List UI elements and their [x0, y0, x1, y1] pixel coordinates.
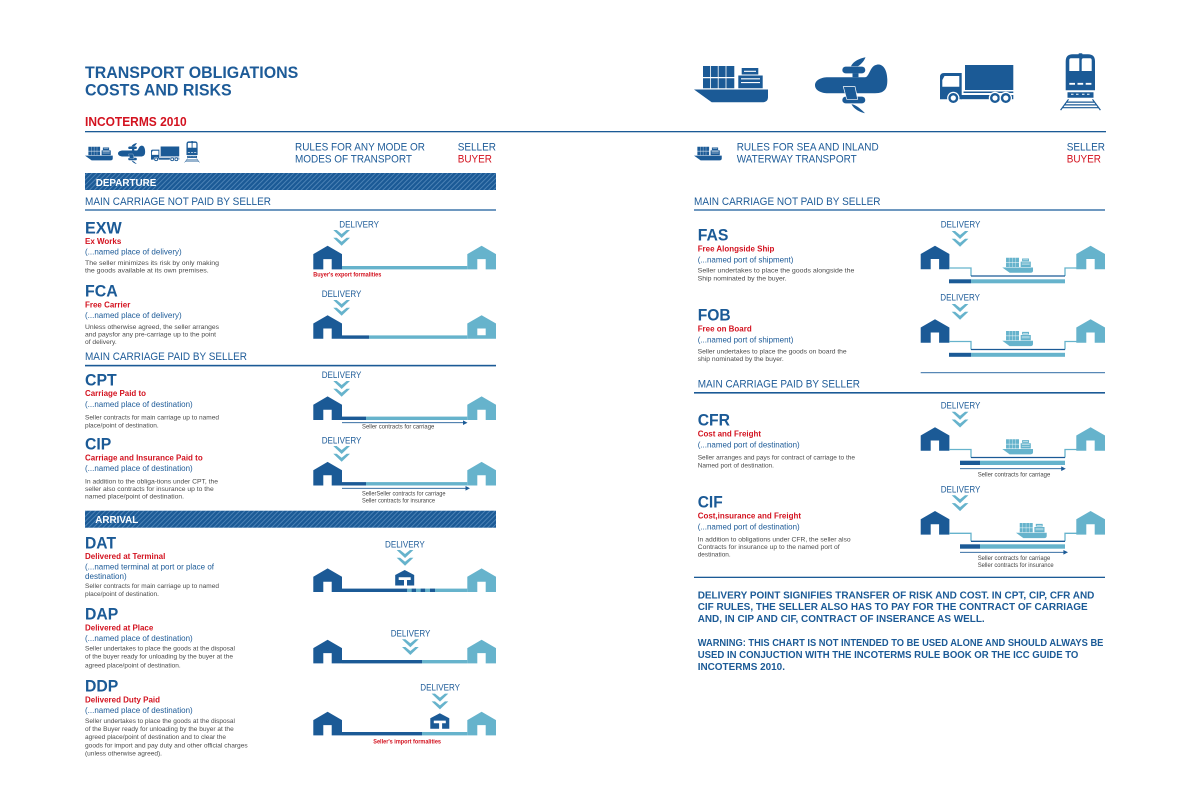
term: FOB: FOB — [698, 307, 731, 325]
term: DDP: (...named place of destination) — [85, 705, 193, 715]
diagram: EXW: Buyer's export formalities — [313, 272, 382, 278]
term: DAT: (...named terminal at port or place of — [85, 562, 215, 572]
term: EXW: (...named place of delivery) — [85, 246, 182, 256]
diagram: CIP: SellerSeller contracts for carriage — [362, 492, 446, 498]
heading: main carriage paid by seller (left): MAIN CARRIAGE PAID BY SELLER — [85, 351, 247, 363]
term: DAT: destination) — [85, 571, 127, 581]
diagram: CIP — [313, 436, 496, 505]
term: DAT: DAT — [85, 534, 116, 552]
term: CIP: In addition to the obliga-tions under CPT, the — [85, 478, 218, 485]
diagram: CIP: Seller contracts for insurance — [362, 499, 436, 505]
legend: seller and buyer: SELLER — [1067, 142, 1105, 154]
term: CIF — [698, 494, 851, 559]
term: CIP: Carriage and Insurance Paid to — [85, 453, 203, 462]
legend: seller and buyer: SELLER — [458, 142, 496, 154]
term: FAS: Ship nominated by the buyer. — [698, 275, 787, 282]
heading: rules for any mode: MODES OF TRANSPORT — [295, 154, 412, 166]
diagram: CFR: Seller contracts for carriage — [978, 472, 1051, 478]
term: DDP: DDP — [85, 678, 118, 696]
term: CPT: CPT — [85, 371, 117, 389]
term: DAP: Delivered at Place — [85, 623, 154, 632]
heading: rules for sea and inland waterway: WATERWAY TRANSPORT — [737, 153, 857, 165]
term: CFR: CFR — [698, 412, 730, 430]
diagram: DDP — [313, 683, 496, 746]
term: CIF: In addition to obligations under CFR, the seller also — [698, 537, 851, 544]
term: CPT — [85, 371, 219, 429]
diagram: DAT — [313, 539, 496, 592]
term: DAP: Seller undertakes to place the goods at the disposal — [85, 646, 236, 653]
band: arrival: ARRIVAL — [95, 514, 139, 526]
legend: seller and buyer — [1067, 142, 1105, 165]
heading: rules for sea and inland waterway: RULES FOR SEA AND INLAND — [737, 142, 879, 154]
diagram: FCA: DELIVERY — [322, 289, 361, 299]
term: EXW: Ex Works — [85, 237, 122, 246]
term: DDP: of the Buyer ready for unloading by the buyer at the — [85, 726, 234, 733]
heading: main carriage paid by seller (right): MAIN CARRIAGE PAID BY SELLER — [698, 378, 860, 390]
term: FOB — [698, 307, 847, 363]
heading: rules for any mode: RULES FOR ANY MODE OR — [295, 142, 425, 154]
term: FAS: (...named port of shipment) — [698, 254, 794, 264]
icon: plane — [815, 57, 887, 113]
term: FAS: FAS — [698, 227, 728, 245]
icons: large transport modes — [694, 53, 1100, 113]
diagram: FOB: DELIVERY — [940, 293, 980, 303]
diagram: DAT: DELIVERY — [385, 539, 425, 549]
note: delivery point: AND, IN CIP AND CIF, CONTRACT OF INSERANCE AS WELL. — [698, 614, 985, 625]
term: FCA — [85, 283, 220, 346]
term: EXW: the goods available at its own premises. — [85, 268, 209, 275]
term: CIP: named place/point of destination. — [85, 494, 184, 501]
term: EXW: EXW — [85, 219, 122, 237]
term: DDP: (unless otherwise agreed). — [85, 750, 162, 757]
diagram: CPT: DELIVERY — [322, 370, 361, 380]
diagram: CIP: DELIVERY — [322, 436, 361, 446]
diagram: CFR — [921, 401, 1105, 478]
term: FAS — [698, 227, 855, 282]
heading: main carriage not paid by seller (left): MAIN CARRIAGE NOT PAID BY SELLER — [85, 196, 271, 208]
term: FCA: Unless otherwise agreed, the seller arranges — [85, 324, 220, 331]
term: DAP: (...named place of destination) — [85, 633, 193, 643]
term: CPT: (...named place of destination) — [85, 399, 193, 409]
term: CIP: (...named place of destination) — [85, 463, 193, 473]
diagram: CIF: DELIVERY — [941, 484, 980, 494]
term: DDP: goods for import and pay duty and other official charges — [85, 742, 248, 749]
legend: seller and buyer: BUYER — [458, 154, 492, 166]
term: FOB: Seller undertakes to place the goods on board the — [698, 348, 847, 355]
icon: truck — [940, 65, 1013, 104]
term: CFR: Seller arranges and pays for contract of carriage to the — [698, 455, 855, 462]
band: departure: DEPARTURE — [96, 177, 156, 189]
term: FAS: Seller undertakes to place the goods alongside the — [698, 268, 855, 275]
term: DAP: agreed place/point of destination. — [85, 662, 181, 669]
heading: main carriage not paid by seller (right): MAIN CARRIAGE NOT PAID BY SELLER — [694, 196, 881, 208]
subtitle: Incoterms 2010: INCOTERMS 2010 — [85, 115, 187, 129]
icons: small transport modes — [85, 141, 200, 164]
note: delivery point — [698, 590, 1094, 625]
icon: train — [1061, 53, 1100, 110]
legend: seller and buyer: BUYER — [1067, 153, 1101, 165]
term: DDP — [85, 678, 248, 757]
diagram: DDP: DELIVERY — [420, 683, 460, 693]
legend: seller and buyer — [458, 142, 496, 166]
term: DDP: Seller undertakes to place the goods at the disposal — [85, 718, 236, 725]
term: DAP: of the buyer ready for unloading by the buyer at the — [85, 654, 233, 661]
term: EXW: The seller minimizes its risk by only making — [85, 260, 219, 267]
panel header: sea and inland waterway — [694, 142, 1105, 165]
diagram: DDP: Seller's import formalities — [373, 740, 442, 746]
term: CFR: Named port of destination. — [698, 463, 774, 470]
title: COSTS AND RISKS — [85, 82, 232, 100]
diagram: FCA — [313, 289, 496, 339]
term: CFR — [698, 412, 855, 470]
diagram: CIF: Seller contracts for insurance — [978, 563, 1054, 569]
note: warning — [698, 638, 1104, 673]
diagram: EXW — [313, 219, 496, 278]
band: arrival — [85, 511, 496, 528]
diagram: CIF — [921, 484, 1105, 569]
note: delivery point: DELIVERY POINT SIGNIFIES TRANSFER OF RISK AND COST. IN CPT, CIP, CFR AND — [698, 590, 1094, 601]
term: EXW — [85, 219, 219, 275]
diagram: CPT: Seller contracts for carriage — [362, 425, 435, 431]
diagram: CFR: DELIVERY — [941, 401, 980, 411]
band: departure — [85, 173, 496, 190]
heading: rules for any mode — [295, 142, 425, 166]
term: CIF: (...named port of destination) — [698, 521, 800, 531]
term: CIF: Cost,insurance and Freight — [698, 512, 801, 521]
term: DAP: DAP — [85, 606, 118, 624]
title: TRANSPORT OBLIGATIONS — [85, 64, 298, 82]
diagram: FAS — [921, 220, 1105, 283]
term: CPT: Seller contracts for main carriage up to named — [85, 414, 219, 421]
term: FCA: and paysfor any pre-carriage up to the point — [85, 332, 216, 339]
note: warning: USED IN CONJUCTION WITH THE INCOTERMS RULE BOOK OR THE ICC GUIDE TO — [698, 650, 1079, 661]
term: FOB: ship nominated by the buyer. — [698, 356, 784, 363]
diagram: CIF: Seller contracts for carriage — [978, 556, 1051, 562]
term: CIF: Contracts for insurance up to the named port of — [698, 544, 840, 551]
term: CIP: seller also contracts for insurance up to the — [85, 486, 214, 493]
term: DDP: Delivered Duty Paid — [85, 695, 160, 704]
term: FAS: Free Alongside Ship — [698, 245, 775, 254]
term: FCA: of delivery. — [85, 339, 117, 346]
term: CIF: CIF — [698, 494, 723, 512]
diagram: FAS: DELIVERY — [941, 220, 980, 230]
term: DAT: Seller contracts for main carriage up to named — [85, 583, 219, 590]
term: CIP: CIP — [85, 436, 111, 454]
term: FOB: (...named port of shipment) — [698, 334, 794, 344]
diagram: DAP: DELIVERY — [391, 629, 430, 639]
icon: container ship — [694, 66, 768, 102]
title — [85, 64, 298, 100]
term: CPT: Carriage Paid to — [85, 389, 146, 398]
term: DAP — [85, 606, 236, 669]
panel header: any mode of transport — [85, 141, 496, 166]
term: DAT: place/point of destination. — [85, 591, 159, 598]
diagram: EXW: DELIVERY — [339, 219, 379, 229]
diagram: FOB — [921, 293, 1105, 357]
term: FCA: (...named place of delivery) — [85, 310, 182, 320]
term: DDP: agreed place/point of destination and to clear the — [85, 734, 226, 741]
diagram: DAP — [313, 629, 496, 663]
diagram: CPT — [313, 370, 496, 431]
term: FCA: Free Carrier — [85, 300, 130, 309]
term: CIF: destination. — [698, 552, 731, 559]
term: CIP — [85, 436, 218, 501]
term: CFR: (...named port of destination) — [698, 439, 800, 449]
term: DAT — [85, 534, 219, 598]
icon: small ship — [694, 147, 722, 160]
note: delivery point: CIF RULES, THE SELLER ALSO HAS TO PAY FOR THE CONTRACT OF CARRIAGE — [698, 602, 1088, 613]
term: DAT: Delivered at Terminal — [85, 552, 165, 561]
term: FOB: Free on Board — [698, 325, 752, 334]
term: CPT: place/point of destination. — [85, 422, 159, 429]
note: warning: INCOTERMS 2010. — [698, 662, 785, 673]
term: FCA: FCA — [85, 283, 118, 301]
note: warning: WARNING: THIS CHART IS NOT INTENDED TO BE USED ALONE AND SHOULD ALWAYS BE — [698, 638, 1104, 649]
term: CFR: Cost and Freight — [698, 430, 761, 439]
heading: rules for sea and inland waterway — [737, 142, 879, 165]
